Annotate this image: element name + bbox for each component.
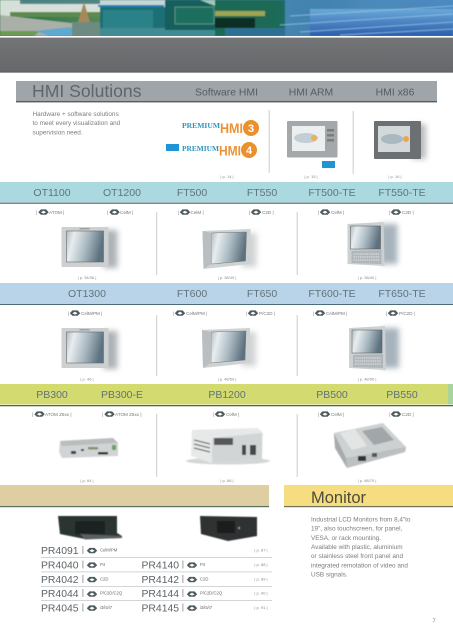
page references: row 2: | p. 46 | (80, 376, 94, 382)
page references: row 3 (80, 478, 376, 483)
column heading: HMI ARM: HMI ARM (289, 88, 333, 98)
logo: Premium HMI 3: PREMIUM (182, 123, 221, 130)
band: OT1100 series: OT1100 (33, 187, 71, 199)
band: OT1300 series: FT650-TE (378, 288, 426, 300)
page references: row 3: | p. 66 | (220, 478, 234, 483)
processor labels: row 2: | (246, 311, 247, 316)
band: OT1100 series: FT500 (177, 187, 207, 199)
monitor description: VESA, or rack mounting. (311, 535, 381, 542)
page references: software row: | p. 15 | (304, 174, 318, 179)
product: HMI ARM panel (287, 121, 338, 168)
page references: row 2: | p. 48/50 | (218, 376, 236, 382)
product: OT1300 panel (62, 328, 118, 369)
processor labels: row 3: | (213, 412, 214, 417)
page references: software row (220, 174, 402, 179)
header photo (0, 0, 453, 36)
product: FT500 panel (202, 229, 256, 269)
row: PR4040 / PR4140: PR4040 (41, 560, 79, 572)
band: OT1100 series: FT550 (247, 187, 277, 199)
intro text: to meet every visualization and (32, 120, 121, 127)
processor labels: row 2: | (386, 311, 387, 316)
row: PR4091: CelM/PM (100, 548, 118, 552)
processor labels: row 2: CelM/PM | (186, 311, 207, 316)
monitor description: Industrial LCD Monitors from 8,4”to (311, 516, 411, 524)
processor labels: row 2: CelM/PM | (326, 311, 347, 316)
processor labels: row 2: | (68, 311, 69, 316)
row: PR4045 / PR4145 (41, 604, 268, 614)
monitor description: integrated remotation of video and (311, 562, 408, 569)
processor labels: row 1: | (389, 210, 390, 215)
page number: 7 (432, 618, 436, 624)
processor labels: row 3: ATOM Z5xx | (45, 412, 72, 417)
product: compact chassis (200, 516, 257, 541)
row: PR4091: | p. 87 | (254, 548, 268, 552)
row: PR4040 / PR4140: P4 (100, 562, 106, 567)
logo: Premium HMI 3 (182, 120, 259, 136)
processor labels: row 1: C2D | (262, 210, 274, 215)
processor labels: row 3: | (32, 412, 33, 417)
column heading: Software HMI: Software HMI (195, 88, 258, 98)
monitor description: 19”, also touchscreen, for panel, (311, 526, 403, 533)
page references: row 2 (80, 376, 376, 382)
logo: Premium HMI 4: PREMIUM (182, 146, 220, 153)
band: Monitor heading (284, 485, 453, 507)
row: PR4040 / PR4140 (41, 560, 268, 572)
band: OT1300 series: FT650 (247, 288, 277, 300)
logo: Premium HMI 3: HMI (220, 120, 243, 136)
row: PR4040 / PR4140: | p. 88 | (254, 562, 268, 567)
processor labels: row 1: | (178, 210, 179, 215)
row: PR4045 / PR4145: i3/i5/i7 (100, 605, 113, 610)
intro text: supervision need. (32, 129, 83, 136)
band: PB series: PB1200 (208, 389, 246, 401)
processor labels: row 2: | (313, 311, 314, 316)
band: OT1300 series (0, 283, 453, 305)
band: OT1100 series: FT500-TE (308, 187, 356, 199)
band: OT1300 series: OT1300 (68, 288, 106, 300)
processor labels: row 1: | (36, 210, 37, 215)
processor labels: row 2: P/C2D | (399, 311, 415, 316)
product: PB500 box (334, 423, 406, 468)
row: PR4042 / PR4142: C2D (200, 576, 208, 582)
row: PR4042 / PR4142 (41, 575, 268, 586)
processor labels: row 3: | (389, 412, 390, 417)
page references: row 2: | p. 48/50 | (358, 376, 376, 382)
product: rack chassis (58, 516, 122, 540)
page references: row 1: | p. 38/40 | (218, 275, 236, 280)
band: OT1300 series: FT600-TE (308, 288, 356, 300)
row: PR4042 / PR4142: PR4042 (41, 575, 79, 586)
row: PR4091: PR4091 (41, 546, 79, 557)
product: PB1200 box (186, 428, 270, 464)
processor labels: row 1: CelM | (190, 210, 204, 215)
band: PB series: PB550 (386, 389, 418, 401)
processor labels: row 1: | (249, 210, 250, 215)
column heading: HMI x86: HMI x86 (376, 88, 415, 98)
processor labels: row 2: P/C2D | (259, 311, 275, 316)
processor labels: row 1: | (107, 210, 108, 215)
product: FT500-TE panel (348, 222, 398, 266)
product: OT1100 panel (62, 227, 118, 268)
processor labels: row 1: ATOM | (49, 210, 64, 215)
row: PR4040 / PR4140: P4 (200, 562, 206, 567)
processor labels: row 3: CelM | (331, 412, 344, 417)
band: OT1100 series (0, 182, 453, 204)
heading: HMI Solutions (32, 81, 142, 101)
page references: row 1: | p. 34/36 | (78, 275, 96, 280)
page references: row 1: | p. 38/40 | (358, 275, 376, 280)
product: FT600 panel (202, 328, 256, 368)
logo: Premium HMI 3: 3 (248, 123, 254, 135)
row: PR4044 / PR4144: P/C2D/C2Q (200, 590, 223, 596)
row: PR4044 / PR4144: | p. 90 | (254, 590, 268, 596)
processor labels: row 2 (68, 310, 415, 316)
processor labels: row 1: CelM | (120, 210, 133, 215)
processor labels: row 3: C2D | (402, 412, 414, 417)
band: Monitor heading: Monitor (311, 489, 367, 507)
row: PR4045 / PR4145: i3/i5/i7 (200, 605, 213, 610)
page references: row 3: | p. 68/70 | (358, 478, 376, 483)
monitor description: or stainless steel front panel and (311, 553, 403, 560)
monitor description: USB signals. (311, 572, 348, 579)
processor labels: row 1: | (318, 210, 319, 215)
row: PR4091 (41, 546, 268, 557)
page references: row 3: | p. 64 | (80, 478, 94, 483)
table: PR models (41, 546, 272, 614)
processor labels: row 3: ATOM Z5xx | (115, 412, 142, 417)
row: PR4042 / PR4142: PR4142 (142, 575, 179, 586)
row: PR4044 / PR4144: PR4044 (41, 589, 79, 600)
page references: row 1 (78, 275, 376, 280)
logo: Premium HMI 4: 4 (246, 145, 253, 157)
intro text: Hardware + software solutions (32, 111, 119, 118)
product: PB300 box (59, 438, 118, 458)
processor labels: row 3: CelM | (226, 412, 239, 417)
row: PR4045 / PR4145: PR4145 (142, 604, 179, 614)
processor labels: row 3 (32, 411, 414, 417)
row: PR4040 / PR4140: PR4140 (142, 560, 179, 572)
processor labels: row 1: C2D | (402, 210, 414, 215)
row: PR4042 / PR4142: | p. 89 | (254, 576, 268, 582)
page references: software row: | p. 16 | (388, 174, 402, 179)
band: PB series: PB300 (36, 389, 68, 401)
logo: Premium HMI 4: HMI (219, 142, 241, 158)
row: PR4044 / PR4144: P/C2D/C2Q (100, 590, 123, 596)
processor labels: row 3: | (102, 412, 103, 417)
row: PR4042 / PR4142: C2D (100, 576, 108, 582)
monitor description: Available with plastic, aluminium (311, 544, 403, 551)
band: PR series (tan) (0, 485, 269, 507)
processor labels: row 3: | (318, 412, 319, 417)
row: PR4045 / PR4145: | p. 91 | (254, 605, 268, 610)
processor labels: row 2: CelM/PM | (81, 311, 102, 316)
band: PB series: PB500 (316, 389, 348, 401)
band: OT1100 series: OT1200 (103, 187, 141, 199)
processor labels: row 1 (36, 209, 414, 215)
band: OT1100 series: FT550-TE (378, 187, 426, 199)
logo: Premium HMI 4 (166, 142, 257, 158)
row: PR4045 / PR4145: PR4045 (41, 604, 79, 614)
product: FT600-TE panel (349, 326, 399, 370)
heading bar: HMI Solutions (16, 81, 437, 102)
grey header band (0, 36, 453, 73)
processor labels: row 2: | (173, 311, 174, 316)
processor labels: row 1: CelM | (331, 210, 344, 215)
band: PB series (0, 384, 453, 406)
page references: software row: | p. 14 | (220, 174, 234, 179)
product: HMI x86 panel (374, 121, 426, 159)
band: PB series: PB300-E (101, 389, 143, 401)
row: PR4044 / PR4144 (41, 589, 268, 600)
row: PR4044 / PR4144: PR4144 (142, 589, 179, 600)
band: OT1300 series: FT600 (177, 288, 207, 300)
